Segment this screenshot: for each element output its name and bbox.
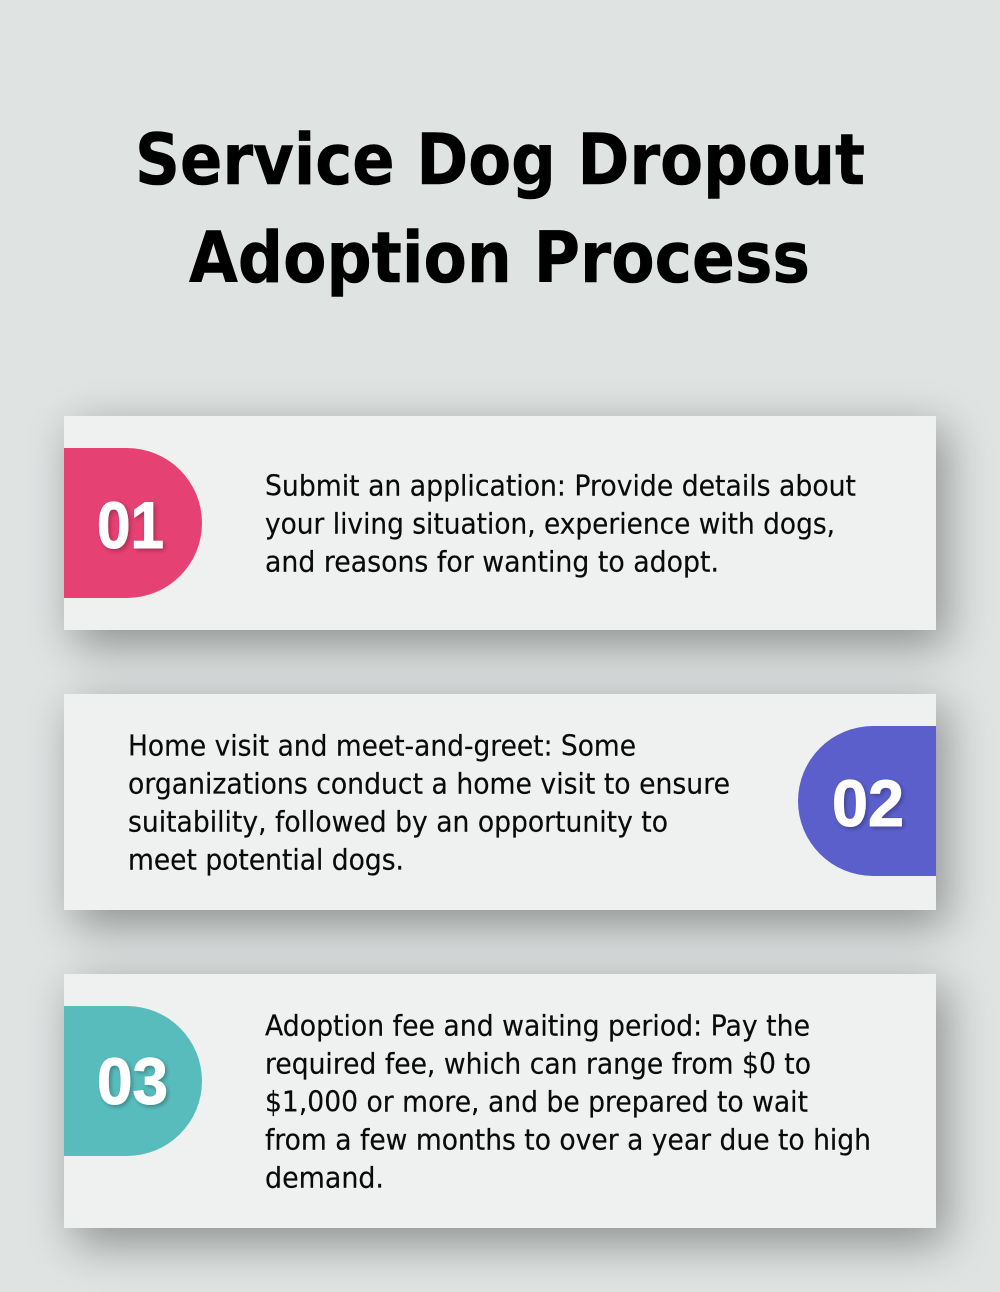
- text: step 1 description: and reasons for wanting to adopt.: [265, 546, 719, 578]
- title: Service Dog Dropout: [135, 119, 865, 201]
- text: step 2 description: [128, 730, 730, 876]
- text: step 2 description: Home visit and meet-and-greet: Some: [128, 730, 636, 762]
- badge: 03: [64, 1006, 202, 1156]
- text: step 1 description: [265, 470, 856, 578]
- badge: 01: [64, 448, 202, 598]
- badge: 03: 03: [97, 1044, 168, 1118]
- panel: step 2: [64, 694, 946, 926]
- title: [135, 119, 865, 299]
- text: step 3 description: Adoption fee and waiting period: Pay the: [265, 1010, 810, 1042]
- text: step 3 description: from a few months to over a year due to high: [265, 1124, 871, 1156]
- title: Adoption Process: [189, 217, 810, 299]
- text: step 3 description: demand.: [265, 1162, 384, 1194]
- text: step 3 description: $1,000 or more, and be prepared to wait: [265, 1086, 808, 1118]
- text: step 1 description: your living situation, experience with dogs,: [265, 508, 835, 540]
- badge: 02: 02: [832, 766, 904, 840]
- panel: step 1: [64, 416, 946, 646]
- text: step 2 description: meet potential dogs.: [128, 844, 404, 876]
- badge: 02: [798, 726, 936, 876]
- badge: 01: 01: [97, 488, 164, 562]
- text: step 2 description: suitability, followed by an opportunity to: [128, 806, 668, 838]
- text: step 2 description: organizations conduct a home visit to ensure: [128, 768, 730, 800]
- text: step 1 description: Submit an application: Provide details about: [265, 470, 856, 502]
- text: step 3 description: [265, 1010, 871, 1194]
- text: step 3 description: required fee, which can range from $0 to: [265, 1048, 811, 1080]
- panel: step 3: [64, 974, 946, 1244]
